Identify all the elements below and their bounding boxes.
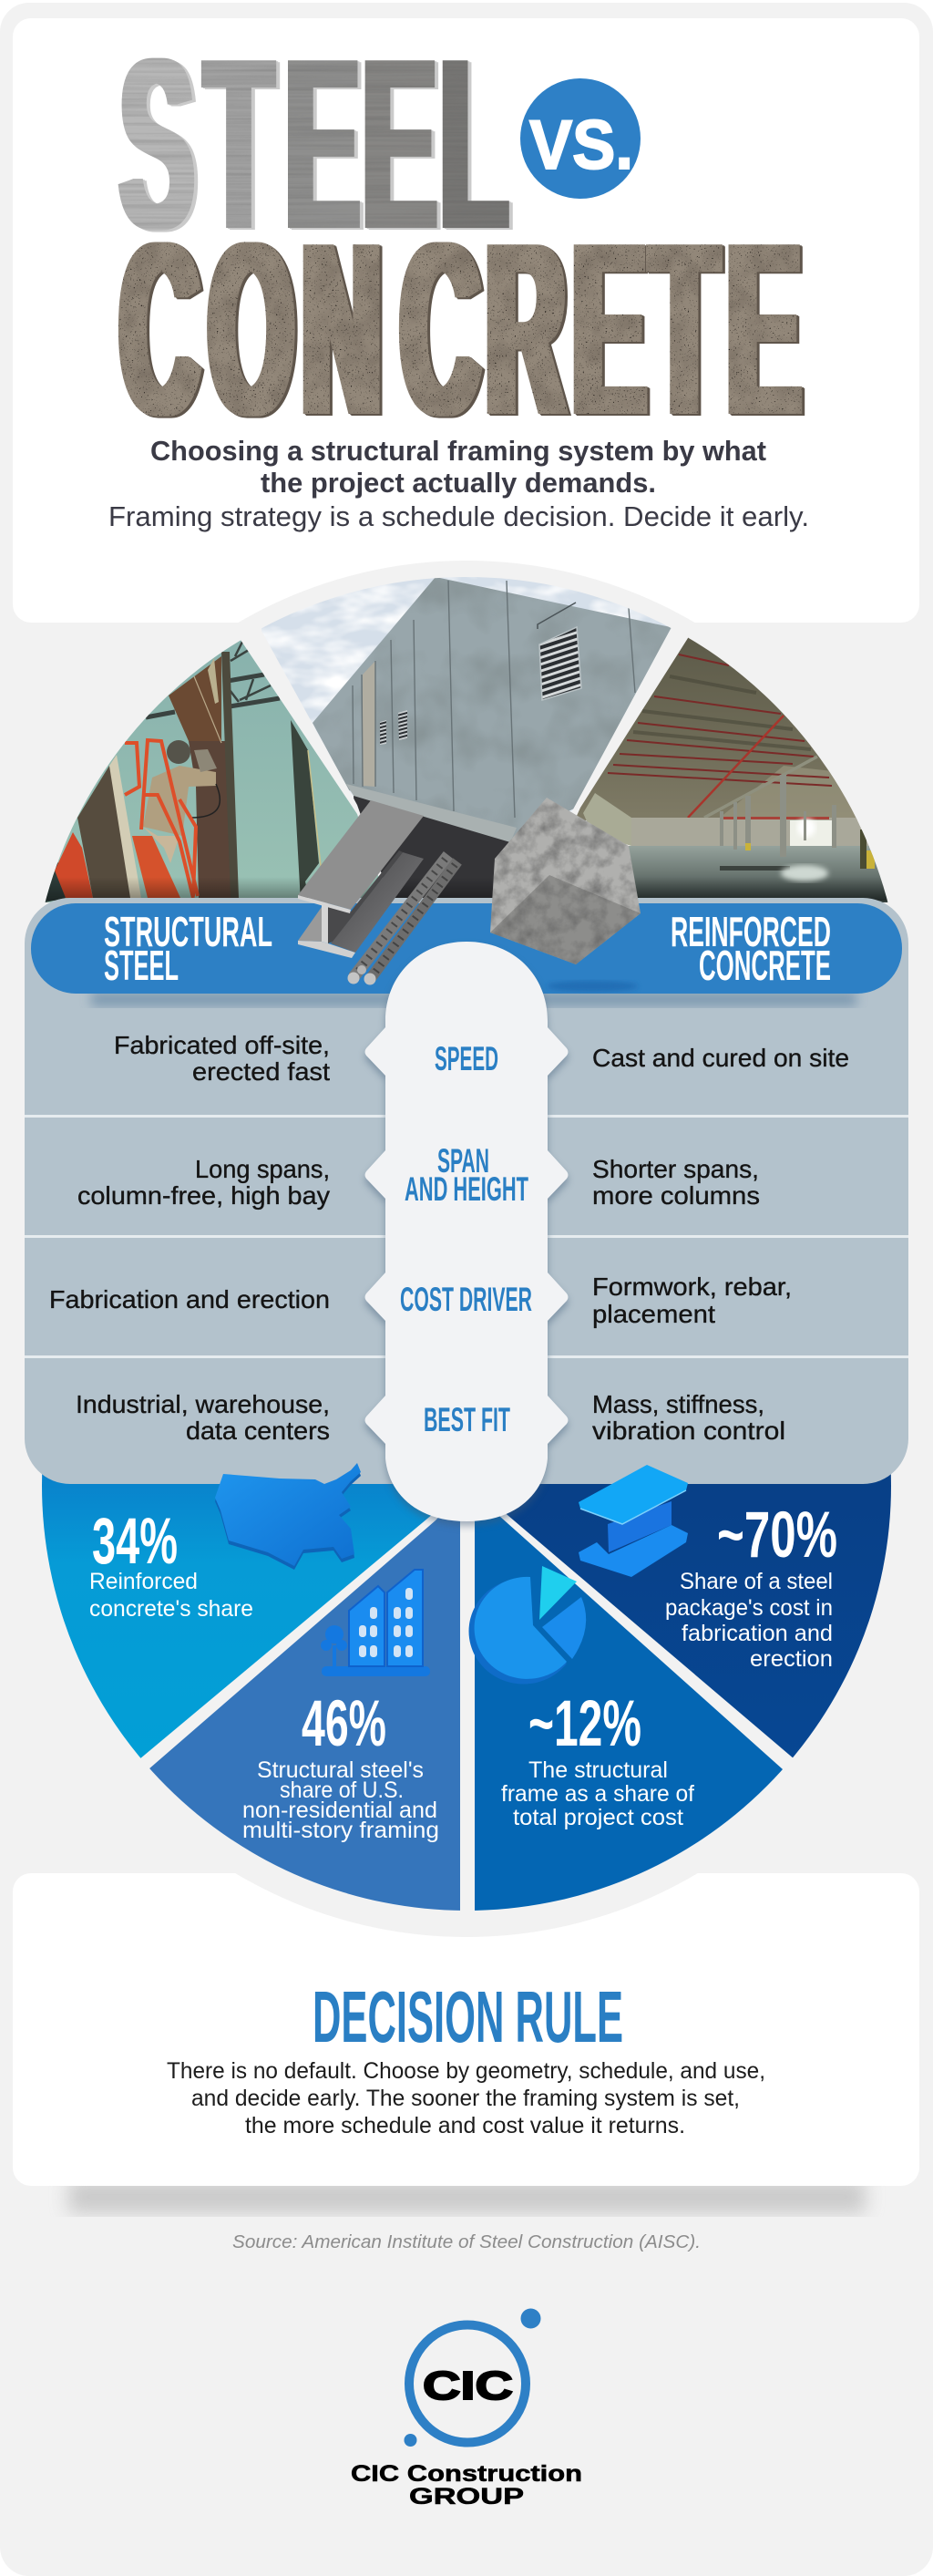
stat: ~70%: package's cost in: [665, 1595, 833, 1621]
title: CONCRETE: E: [573, 192, 645, 467]
text: decision rule body: [167, 2058, 765, 2138]
subtitle: [108, 435, 809, 532]
row: speed: erected fast: [192, 1057, 330, 1086]
logo: CIC Construction Group: [351, 2308, 582, 2509]
row: speed: Fabricated off-site,: [114, 1031, 330, 1059]
title: CONCRETE: N: [302, 192, 381, 467]
row: best fit: Industrial, warehouse,: [76, 1390, 330, 1418]
stat: ~70%: Share of a steel: [680, 1569, 833, 1594]
title: CONCRETE: O: [209, 192, 293, 467]
row: best fit: BEST FIT: [424, 1401, 510, 1438]
header bar: [31, 903, 902, 994]
row: speed: Cast and cured on site: [592, 1044, 849, 1072]
stat: ~70%: erection: [750, 1646, 833, 1672]
row: best fit: Mass, stiffness,: [592, 1390, 764, 1418]
source note: Source: American Institute of Steel Construction (AISC).: [232, 2232, 701, 2252]
icon: concrete block: [490, 798, 641, 964]
stat: 46%: 46%: [302, 1688, 386, 1760]
center column: [364, 942, 569, 1521]
title: STEEL: E: [285, 9, 360, 281]
row: speed: SPEED: [435, 1040, 498, 1077]
photo bottom shading: [46, 879, 887, 901]
title: STEEL: L: [440, 9, 508, 281]
badge: VS.: [520, 78, 641, 199]
header: reinforced concrete: CONCRETE: [699, 942, 831, 989]
logo: CIC Construction Group: GROUP: [409, 2484, 524, 2509]
title: STEEL: E: [362, 9, 436, 281]
stat: 34%: concrete's share: [89, 1596, 253, 1622]
row: cost driver: [49, 1273, 792, 1328]
badge: VS.: VS.: [529, 107, 633, 184]
row: span and height: [77, 1142, 760, 1210]
stat: ~70%: ~70%: [717, 1499, 837, 1571]
stat: ~70%: [579, 1465, 837, 1672]
icon: buildings: [321, 1570, 430, 1676]
photos: [46, 577, 887, 902]
stat: 46%: non-residential and: [242, 1798, 437, 1823]
ring behind bottom circle: [15, 1035, 918, 1937]
title: STEEL: S: [119, 9, 194, 281]
subtitle: Framing strategy is a schedule decision. Decide it early.: [108, 500, 809, 532]
pie: bottom wedges: [42, 1458, 892, 1923]
stat: 46%: multi-story framing: [242, 1818, 439, 1843]
stat: ~12%: frame as a share of: [501, 1781, 694, 1807]
wedge: 70%: [507, 1474, 891, 1757]
stat: ~70%: fabrication and: [682, 1621, 833, 1646]
row: span and height: SPAN: [437, 1142, 489, 1180]
ring behind top circle: [15, 561, 918, 1465]
photo: welder on steel: [46, 640, 379, 902]
header: structural steel: STEEL: [104, 942, 179, 989]
row: cost driver: Fabrication and erection: [49, 1285, 330, 1314]
stat: ~12%: total project cost: [513, 1805, 683, 1830]
title: CONCRETE: C: [401, 192, 479, 467]
stat: ~12%: [469, 1566, 694, 1830]
row: span and height: more columns: [592, 1181, 760, 1210]
row: cost driver: Formwork, rebar,: [592, 1273, 792, 1301]
row: span and height: column-free, high bay: [77, 1181, 330, 1210]
title: STEEL: [119, 9, 508, 281]
row: cost driver: COST DRIVER: [400, 1281, 532, 1318]
stat: 34%: 34%: [92, 1506, 178, 1578]
title: CONCRETE: C: [120, 192, 199, 467]
panel: decision rule: [13, 1873, 919, 2213]
text: decision rule body: There is no default. Choose by geometry, schedule, and use,: [167, 2058, 765, 2084]
header: structural steel: [104, 908, 272, 989]
icon: US map: [215, 1463, 361, 1570]
stat: 46%: share of U.S.: [280, 1777, 404, 1803]
photo: warehouse interior: [577, 638, 887, 902]
icon: steel I-beam and rebar: [298, 800, 457, 984]
logo: CIC Construction Group: CIC: [423, 2364, 513, 2408]
stat: ~12%: ~12%: [528, 1688, 641, 1760]
header: reinforced concrete: [671, 908, 831, 989]
comparison table: [25, 898, 908, 1521]
stat: 46%: [242, 1570, 439, 1843]
title: STEEL: T: [204, 9, 273, 281]
stat: 46%: Structural steel's: [257, 1757, 424, 1783]
subtitle: the project actually demands.: [261, 467, 656, 499]
subtitle: Choosing a structural framing system by what: [150, 435, 766, 467]
wedge: 34%: [42, 1474, 431, 1758]
icon: pie chart: [469, 1566, 586, 1685]
wedge: 46%: [149, 1518, 460, 1911]
heading: decision rule: DECISION RULE: [313, 1976, 623, 2057]
text: decision rule body: the more schedule and cost value it returns.: [245, 2113, 685, 2138]
title: CONCRETE: T: [651, 192, 717, 467]
header: structural steel: STRUCTURAL: [104, 908, 272, 955]
logo: CIC Construction Group: CIC Construction: [351, 2461, 582, 2487]
title: CONCRETE: [120, 192, 800, 467]
stat: 34%: [89, 1463, 361, 1622]
row: best fit: data centers: [186, 1417, 330, 1445]
row: cost driver: placement: [592, 1300, 715, 1328]
panel: header: [13, 9, 919, 623]
row: best fit: [76, 1390, 785, 1445]
icon: blue I-beam: [579, 1465, 688, 1577]
row: span and height: Shorter spans,: [592, 1155, 759, 1183]
title: CONCRETE: E: [728, 192, 800, 467]
row: span and height: Long spans,: [195, 1155, 330, 1183]
text: decision rule body: and decide early. The sooner the framing system is set,: [191, 2086, 740, 2111]
title: CONCRETE: R: [487, 192, 565, 467]
wedge: 12%: [475, 1517, 783, 1911]
row: best fit: vibration control: [592, 1417, 785, 1445]
row: speed: [114, 1031, 849, 1086]
row: span and height: AND HEIGHT: [405, 1170, 528, 1208]
photo: concrete wall building: [261, 577, 671, 898]
stat: 34%: Reinforced: [89, 1569, 198, 1594]
stat: ~12%: The structural: [528, 1757, 668, 1783]
